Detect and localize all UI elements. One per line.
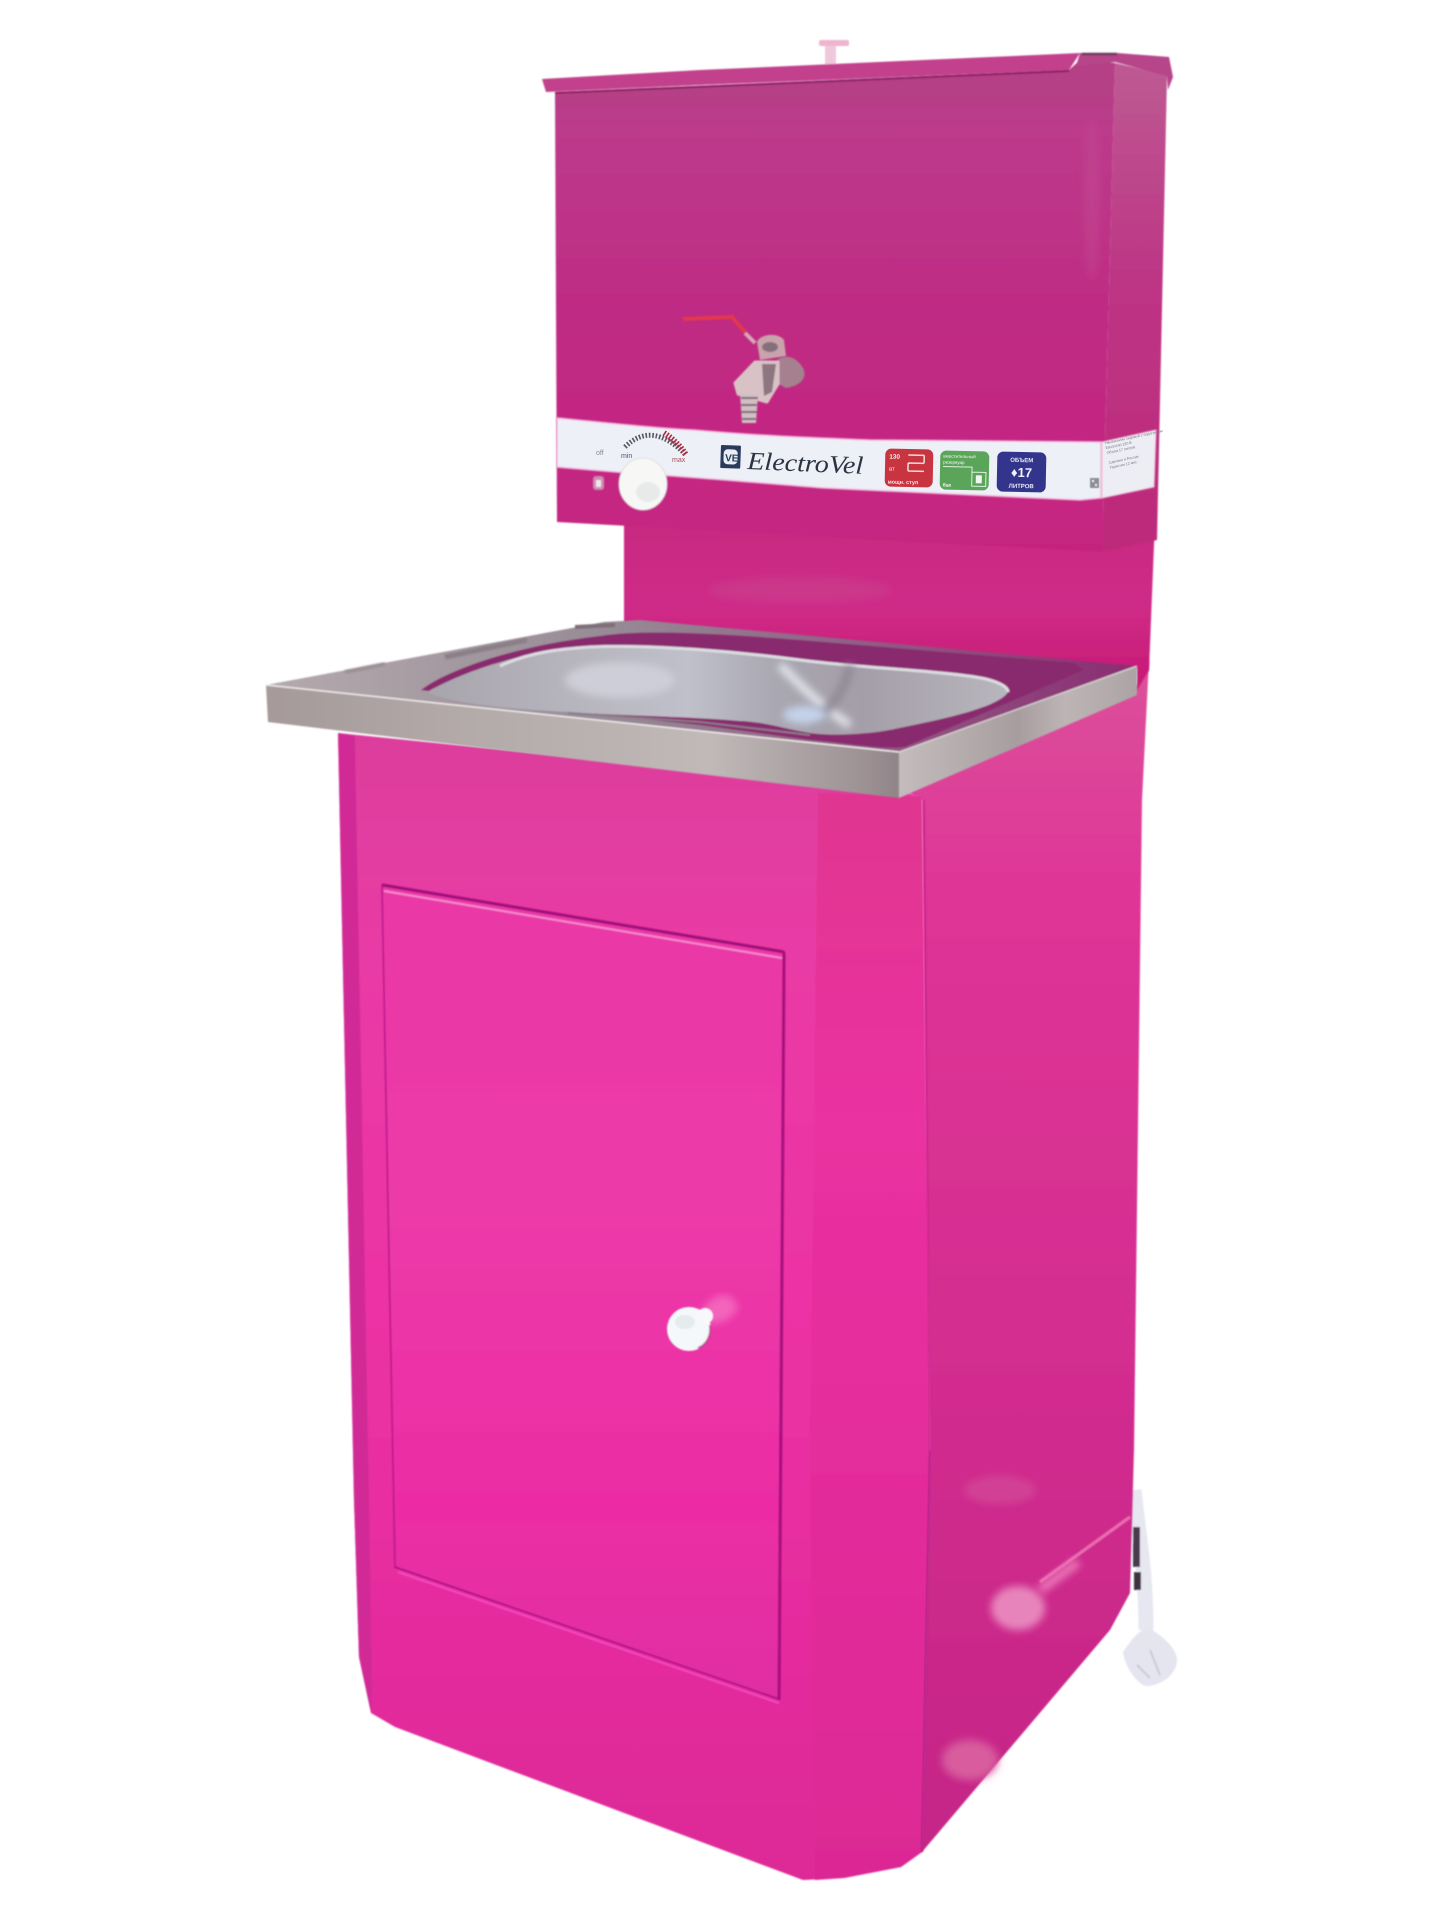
side specification label: Гарантия 12 мес. xyxy=(1109,460,1138,470)
badge: power: 130 xyxy=(889,454,901,461)
front rim xyxy=(266,685,899,798)
dial scale: off xyxy=(596,450,604,457)
badge: tank: бак xyxy=(943,482,952,489)
band side xyxy=(1102,430,1156,498)
sink xyxy=(266,620,1137,798)
brand logo: VE xyxy=(725,453,739,465)
control label band xyxy=(557,418,1169,510)
badge: volume: ОБЪЕМ xyxy=(1010,458,1033,464)
badge: power: мощн. ступ xyxy=(888,480,918,486)
badge: volume: ЛИТРОВ xyxy=(1009,484,1034,490)
badge: power: вт xyxy=(889,467,895,473)
dial scale xyxy=(596,433,686,464)
cabinet right side panel xyxy=(895,660,1149,1852)
cabinet front panel xyxy=(338,733,930,1880)
cabinet door xyxy=(382,885,784,1703)
scuff marks on side panel xyxy=(942,1476,1130,1780)
side specification label: Умывальник садовый с подогревом xyxy=(1104,429,1164,445)
water tank xyxy=(542,40,1173,552)
tank front xyxy=(555,60,1115,552)
QR code xyxy=(1090,478,1099,488)
badge: power xyxy=(885,449,933,488)
power cord and plug xyxy=(1123,1490,1177,1686)
fill cap xyxy=(819,40,849,65)
basin reflection rim xyxy=(421,633,1084,748)
temperature knob xyxy=(619,458,667,510)
band front xyxy=(557,418,1101,500)
badge: tank: вместительный xyxy=(943,453,976,459)
tank lid xyxy=(542,53,1080,92)
steel basin xyxy=(427,646,1008,735)
side specification label: Объем 17 литров xyxy=(1106,445,1136,455)
badge: volume xyxy=(997,452,1046,493)
chamfered corner xyxy=(810,793,930,1880)
left edge stripe xyxy=(338,733,372,1713)
indicator lamp xyxy=(593,476,604,490)
door knob xyxy=(667,1295,738,1351)
sink top surface xyxy=(266,620,1137,752)
mounting slots xyxy=(445,640,527,657)
side specification label: ElectroVel 220 В xyxy=(1105,441,1133,450)
brand name: ElectroVel xyxy=(746,448,864,480)
side specification label: Сделано в России xyxy=(1108,455,1139,465)
dial scale: min xyxy=(621,453,632,460)
backsplash panel xyxy=(624,515,1155,690)
badge: tank xyxy=(940,451,989,491)
right rim xyxy=(899,666,1137,798)
brand logo xyxy=(720,445,741,469)
faucet xyxy=(683,317,804,423)
badge: volume: ♦17 xyxy=(1011,465,1032,480)
badge: tank: резервуар xyxy=(943,460,965,465)
dial scale: max xyxy=(672,457,686,464)
side specification label xyxy=(1104,429,1169,470)
tank side xyxy=(1102,63,1167,552)
